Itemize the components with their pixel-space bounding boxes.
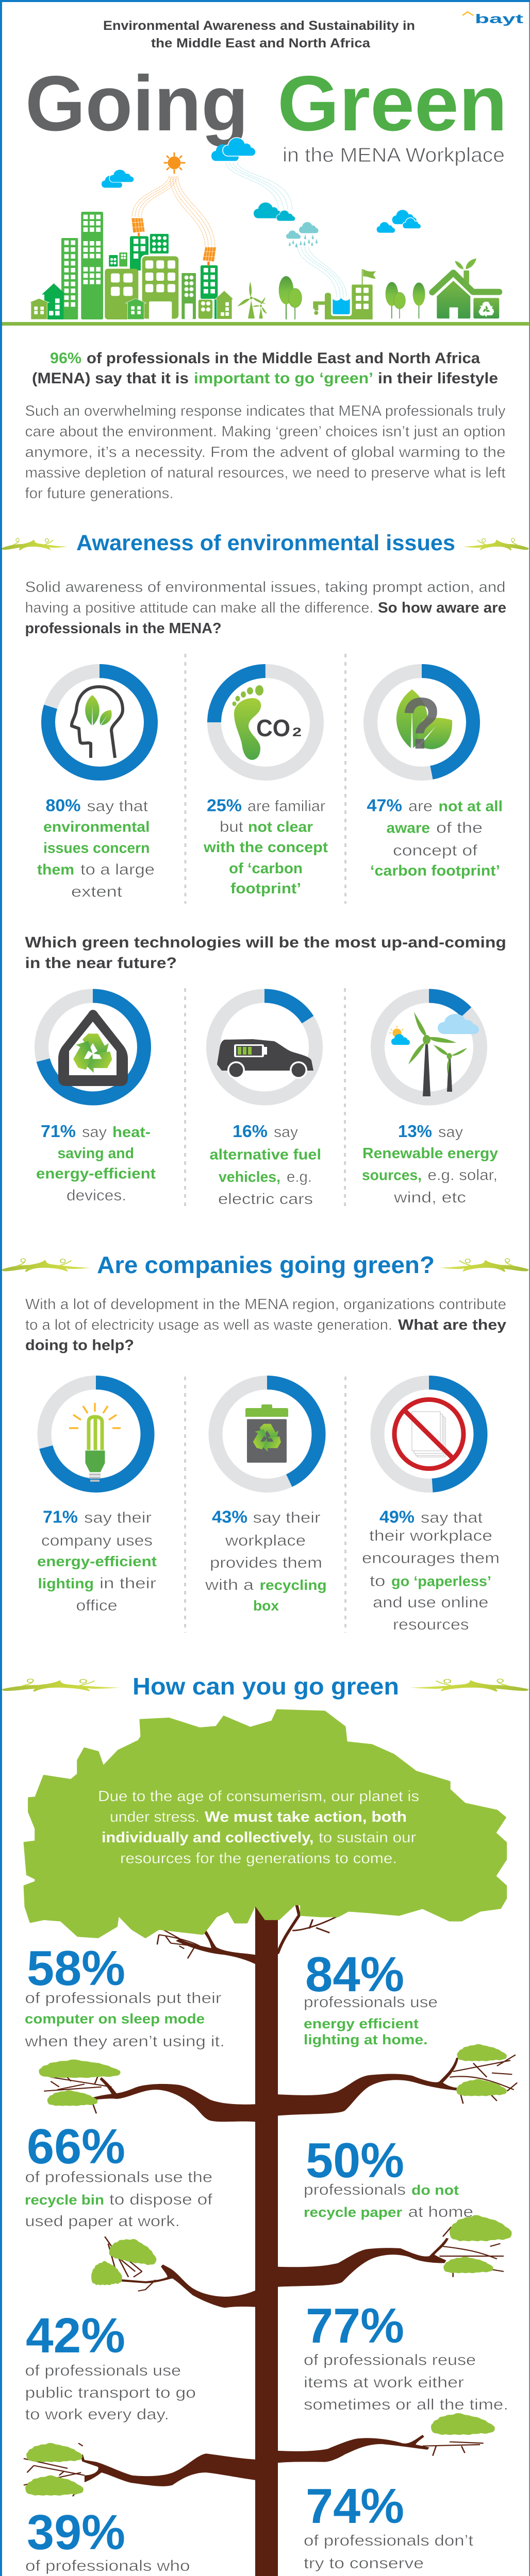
text: 43% recycling box: recycling	[260, 1577, 327, 1593]
text: 25% are familiar	[203, 795, 328, 897]
intro paragraph: Such an overwhelming response indicates that MENA professionals truly	[25, 403, 506, 419]
decoration: right vine	[410, 1679, 529, 1691]
stat: 50% do not recycle paper: at home	[408, 2204, 473, 2221]
text: 25% are familiar: with the concept	[203, 839, 328, 856]
dividers: technology columns	[185, 988, 345, 1208]
stat: 58% sleep mode: of professionals put their	[25, 1990, 222, 2007]
text: 25% are familiar: 25%	[207, 795, 242, 815]
text: 71% energy-efficient lighting: energy-efficient	[37, 1553, 157, 1569]
heading: how can you go green: How can you go green	[132, 1673, 399, 1700]
water vapour lines	[226, 163, 346, 297]
text: 25% are familiar: footprint’	[230, 880, 301, 897]
intro paragraph	[25, 403, 506, 502]
text: 71% energy-efficient lighting: in their	[100, 1575, 156, 1592]
panel: 43% recycling box	[205, 1383, 327, 1614]
stat: 77% reuse items: sometimes or all the time.	[304, 2396, 508, 2413]
intro paragraph: anymore, it’s a necessity. From the advent of global warming to the	[25, 444, 505, 461]
text: 25% are familiar: but	[220, 819, 244, 836]
stat: 42% public transport	[25, 2308, 196, 2423]
intro headline: (MENA) say that it is	[32, 370, 189, 387]
building: lime house	[29, 298, 49, 319]
text: 71% energy-efficient lighting: lighting	[38, 1575, 94, 1591]
branch: upper left	[157, 1928, 255, 1964]
building: dark green small	[150, 234, 169, 253]
text: 25% are familiar: not clear	[248, 819, 313, 836]
decoration: right vine	[463, 538, 529, 550]
icon: leaves with question mark: ?	[402, 683, 441, 765]
text: 71% energy-efficient lighting	[37, 1507, 157, 1614]
building: dark green with solar panel	[130, 218, 148, 270]
dividers: company columns	[185, 1377, 345, 1633]
branch: right three	[278, 2215, 512, 2287]
tree trunk	[255, 1905, 278, 2576]
building: dark green house	[42, 283, 66, 319]
text: 49% say that: to	[370, 1572, 386, 1590]
decoration: left vine	[2, 538, 68, 550]
text: 49% say that: encourages them	[362, 1550, 500, 1567]
illustration: green landscape right	[279, 259, 499, 319]
text: 47% are not at all aware: are	[408, 798, 433, 815]
decoration: left vine	[2, 1259, 91, 1272]
stat: 66% recycle bin: to dispose of	[109, 2191, 213, 2208]
text: 47% are not at all aware	[367, 795, 503, 879]
donut chart: 25%	[214, 671, 317, 774]
stat: 77% reuse items: items at work either	[304, 2374, 464, 2391]
text: 16% alternative fuel: electric cars	[218, 1191, 313, 1208]
icon: house with recycling symbol	[58, 1010, 128, 1086]
intro headline: important to go ‘green’	[194, 370, 373, 387]
text: 80% say that	[37, 795, 155, 901]
icon: wind turbines with sun and cloud	[389, 1012, 479, 1096]
branch: right with foliage	[278, 2044, 517, 2115]
text: 13% renewable energy: 13%	[398, 1122, 432, 1141]
icon: footprint with CO2	[232, 685, 302, 760]
rain clouds	[286, 222, 319, 247]
decoration: right vine	[440, 1259, 529, 1272]
donut chart: 16%	[213, 996, 316, 1098]
text: 25% are familiar: are familiar	[247, 798, 325, 815]
stat: 84% energy efficient lighting: lighting at home.	[304, 2032, 428, 2047]
crown text: to sustain our	[319, 1829, 416, 1846]
ground line	[2, 322, 529, 326]
text: 71% heat-saving: saving and	[58, 1145, 134, 1162]
title: Going Green: Green	[277, 60, 507, 147]
text: 43% recycling box: 43%	[212, 1507, 247, 1526]
building: lime block one	[105, 269, 138, 319]
text: 71% heat-saving: heat-	[112, 1124, 151, 1141]
stats: right column	[304, 1947, 508, 2576]
stat: 58% sleep mode: when they aren’t using it.	[24, 2033, 225, 2050]
stat: 84% energy efficient lighting	[304, 1947, 438, 2047]
icon: trees pair	[279, 276, 302, 319]
building: dark green tower with solar panel	[201, 247, 218, 319]
stat: 84% energy efficient lighting: energy efficient	[304, 2016, 419, 2031]
text: 13% renewable energy	[362, 1122, 498, 1206]
donut chart: 49%	[377, 1383, 481, 1486]
stat: 58% sleep mode: computer on sleep mode	[25, 2011, 205, 2027]
stat: 84% energy efficient lighting: 84%	[305, 1947, 404, 2002]
stat: 39% electric car: of professionals who	[25, 2557, 190, 2574]
stat: 50% do not recycle paper: 50%	[306, 2133, 404, 2188]
text: 80% say that: 80%	[45, 795, 80, 815]
donut chart: 80%	[48, 671, 151, 774]
illustration: sun, clouds and energy lines	[102, 138, 421, 297]
tree branches top	[24, 1710, 517, 2122]
awareness paragraph: having a positive attitude can make all the difference.	[25, 600, 373, 616]
crown text: under stress.	[110, 1809, 200, 1825]
stat: 74% don't conserve: of professionals don’t	[304, 2532, 474, 2549]
text: 49% say that: say that	[421, 1509, 483, 1526]
solar energy lines	[132, 176, 215, 247]
text: 80% say that: issues concern	[43, 840, 150, 857]
title: Going Green: Going	[25, 60, 249, 147]
companies paragraph: to a lot of electricity usage as well as waste generation.	[25, 1317, 392, 1333]
icon: footprint with CO2: 2	[292, 725, 302, 739]
heading: are companies going green: Are companies going green?	[97, 1251, 435, 1278]
intro paragraph: massive depletion of natural resources, we need to preserve what is left	[25, 465, 505, 481]
stat: 42% public transport: 42%	[26, 2308, 125, 2363]
text: 49% say that: resources	[393, 1616, 469, 1633]
text: 47% are not at all aware: concept of	[393, 842, 478, 859]
panel: 13% renewable energy	[362, 996, 498, 1206]
stat: 77% reuse items: 77%	[306, 2298, 404, 2353]
donut chart: 47%	[370, 671, 473, 774]
icon: sun	[164, 153, 185, 173]
awareness paragraph: professionals in the MENA?	[25, 620, 222, 637]
text: 80% say that: to a large	[80, 861, 155, 878]
stat: 74% don't conserve: try to conserve	[304, 2555, 424, 2572]
text: 43% recycling box: workplace	[225, 1532, 306, 1549]
text: 47% are not at all aware: aware	[387, 820, 430, 837]
stat: 50% do not recycle paper	[304, 2133, 473, 2221]
text: 43% recycling box: provides them	[210, 1554, 322, 1571]
companies paragraph: What are they	[398, 1317, 506, 1333]
heading: green technologies question: in the near future?	[25, 955, 177, 972]
tree branches middle	[24, 2215, 512, 2496]
text: 49% say that: their workplace	[369, 1527, 492, 1545]
branch: left four	[24, 2443, 255, 2496]
heading: green technologies question: Which green technologies will be the most up-and-coming	[25, 934, 506, 951]
text: 49% say that	[362, 1507, 500, 1633]
heading: green technologies question	[25, 934, 506, 972]
stat: 42% public transport: public transport to go	[25, 2384, 196, 2401]
cloud: teal	[254, 202, 295, 221]
text: 71% energy-efficient lighting: company uses	[41, 1532, 153, 1549]
crown text: Due to the age of consumerism, our planet is	[98, 1788, 419, 1805]
icon: recycling bin	[245, 1404, 288, 1463]
text: 71% energy-efficient lighting: 71%	[43, 1507, 78, 1526]
building: green house two	[125, 298, 146, 319]
decoration: left vine	[2, 1679, 120, 1691]
text: 49% say that: go ‘paperless’	[391, 1573, 491, 1589]
stat: 66% recycle bin: used paper at work.	[25, 2213, 180, 2230]
heading: awareness of environmental issues: Awareness of environmental issues	[76, 531, 455, 555]
intro headline: of professionals in the Middle East and North Africa	[87, 350, 480, 367]
stat: 77% reuse items	[304, 2298, 508, 2413]
panel: 16% alternative fuel vehicles	[209, 996, 321, 1208]
stat: 66% recycle bin: of professionals use the	[25, 2169, 212, 2185]
stat: 66% recycle bin: recycle bin	[25, 2192, 104, 2208]
building: lime block two	[141, 256, 179, 319]
donut chart: 71%	[44, 1383, 147, 1486]
donut chart: 71%	[41, 996, 144, 1098]
cloud: blue right	[377, 210, 421, 233]
text: 13% renewable energy: e.g. solar,	[428, 1167, 498, 1184]
text: 47% are not at all aware: of the	[436, 819, 483, 837]
crown text: resources for the generations to come.	[120, 1851, 397, 1867]
logo: bayt top right: bayt	[475, 12, 524, 26]
building: left tower	[61, 238, 78, 319]
header subtitle: the Middle East and North Africa	[151, 36, 371, 50]
icon: no paper sign	[394, 1399, 463, 1468]
text: 13% renewable energy: sources,	[362, 1167, 422, 1184]
panel: 25% carbon footprint	[203, 671, 328, 897]
companies paragraph: With a lot of development in the MENA region, organizations contribute	[25, 1296, 506, 1313]
stats: left column	[24, 1941, 225, 2576]
building: tall tower	[81, 212, 103, 319]
panel: 71% heat-saving devices	[36, 996, 156, 1204]
crown text: individually and collectively,	[102, 1829, 313, 1846]
icon: head with leaves	[72, 687, 123, 758]
text: 16% alternative fuel	[209, 1122, 321, 1208]
crown text: We must take action, both	[205, 1809, 407, 1825]
icon: eco house	[432, 259, 499, 319]
text: 43% recycling box: say their	[253, 1509, 321, 1526]
stat: 50% do not recycle paper: professionals	[304, 2181, 406, 2198]
stat: 66% recycle bin	[25, 2119, 213, 2230]
building: lime small	[198, 299, 213, 319]
icon: wind turbines	[238, 282, 267, 318]
icon: electric car	[217, 1039, 313, 1079]
intro headline: in their lifestyle	[378, 370, 498, 387]
text: 16% alternative fuel: vehicles,	[219, 1169, 280, 1185]
dividers: awareness columns	[186, 654, 345, 904]
text: 71% heat-saving: say	[82, 1124, 107, 1141]
text: 13% renewable energy: Renewable energy	[362, 1145, 498, 1162]
text: 80% say that: say that	[87, 798, 148, 815]
text: 71% heat-saving: energy-efficient	[36, 1165, 156, 1182]
stat: 42% public transport: of professionals use	[25, 2362, 181, 2379]
text: 49% say that: and use online	[373, 1594, 489, 1611]
cloud: small blue left	[102, 170, 134, 188]
stat: 58% sleep mode: 58%	[27, 1941, 125, 1996]
awareness paragraph: So how aware are	[378, 600, 506, 616]
icon: footprint with CO2: CO	[256, 715, 290, 741]
branch: left three	[91, 2234, 255, 2308]
text: 71% heat-saving: 71%	[41, 1122, 76, 1141]
stat: 50% do not recycle paper: do not	[411, 2182, 459, 2198]
companies paragraph: doing to help?	[25, 1337, 134, 1354]
text: 71% heat-saving	[36, 1122, 156, 1204]
text: 49% say that: 49%	[379, 1507, 415, 1526]
panel: 47% not at all aware	[367, 671, 503, 879]
text: 16% alternative fuel: 16%	[233, 1122, 268, 1141]
donut chart: 43%	[216, 1383, 319, 1486]
text: 80% say that: them	[37, 862, 74, 878]
header subtitle: Environmental Awareness and Sustainability in	[103, 19, 415, 33]
text: 16% alternative fuel: say	[274, 1124, 298, 1141]
branch: left with foliage	[39, 2060, 255, 2122]
stat: 74% don't conserve: 74%	[306, 2479, 404, 2534]
text: 16% alternative fuel: alternative fuel	[209, 1147, 321, 1163]
text: 43% recycling box: with a	[205, 1577, 254, 1594]
stat: 84% energy efficient lighting: professionals use	[304, 1994, 438, 2011]
text: 80% say that: extent	[71, 883, 123, 901]
panel: 80% environmental issues	[37, 671, 155, 901]
text: 71% energy-efficient lighting: office	[76, 1597, 118, 1614]
text: 43% recycling box: box	[253, 1598, 279, 1614]
stat: 39% electric car: 39%	[27, 2505, 125, 2560]
crown text	[98, 1788, 419, 1867]
donut chart: 13%	[377, 996, 481, 1098]
cloud: large blue	[211, 138, 256, 161]
building: narrow tower	[181, 273, 196, 319]
subtitle: in the MENA Workplace: in the MENA Workplace	[283, 144, 505, 166]
intro paragraph: for future generations.	[25, 485, 173, 502]
stat: 39% electric car	[25, 2505, 209, 2576]
text: 13% renewable energy: wind, etc	[393, 1189, 466, 1206]
text: 47% are not at all aware: 47%	[367, 795, 402, 815]
stat: 50% do not recycle paper: recycle paper	[304, 2205, 403, 2220]
text: 71% energy-efficient lighting: say their	[84, 1509, 152, 1526]
stat: 58% sleep mode	[24, 1941, 225, 2050]
intro headline: 96%	[50, 350, 81, 367]
awareness paragraph: Solid awareness of environmental issues, taking prompt action, and	[25, 579, 505, 596]
text: 47% are not at all aware: ‘carbon footprint’	[370, 863, 500, 879]
text: 43% recycling box	[205, 1507, 327, 1614]
title: Going Green	[25, 60, 507, 147]
stat: 77% reuse items: of professionals reuse	[304, 2351, 476, 2369]
text: 47% are not at all aware: not at all	[438, 799, 503, 815]
panel: 49% go paperless	[362, 1383, 500, 1633]
icon: trees right	[386, 282, 425, 318]
text: 13% renewable energy: say	[438, 1124, 463, 1141]
text: 16% alternative fuel: e.g.	[287, 1168, 312, 1185]
intro headline	[32, 350, 498, 387]
branch: right four	[278, 2413, 495, 2463]
building: lime house three	[215, 291, 234, 319]
icon: energy-saving bulb	[69, 1403, 121, 1481]
companies paragraph	[25, 1296, 506, 1354]
stat: 66% recycle bin: 66%	[27, 2119, 125, 2174]
text: 71% heat-saving: devices.	[67, 1187, 126, 1204]
logo: bayt top right	[462, 12, 524, 26]
icon: water tank building	[313, 269, 376, 319]
building: small green blocks	[109, 252, 127, 266]
panel: 71% energy-efficient lighting	[37, 1383, 157, 1614]
stat: 74% don't conserve	[304, 2479, 486, 2576]
text: 80% say that: environmental	[43, 819, 150, 836]
header subtitle	[103, 19, 415, 50]
awareness paragraph	[25, 579, 506, 637]
intro paragraph: care about the environment. Making ‘green’ choices isn’t just an option	[25, 423, 505, 440]
text: 25% are familiar: of ‘carbon	[229, 860, 303, 877]
branch: upper right	[278, 1905, 299, 1953]
illustration: city buildings	[29, 212, 267, 319]
tree crown	[24, 1710, 506, 1938]
stat: 42% public transport: to work every day.	[25, 2406, 169, 2423]
